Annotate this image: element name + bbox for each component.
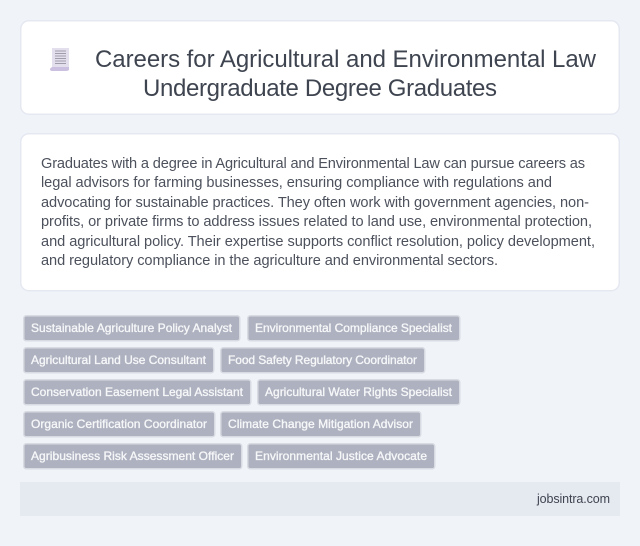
text block: description: Graduates with a degree in Agricultural and Environmental Law can pursue careers as: [41, 156, 585, 172]
tag: Climate Change Mitigation Advisor: [228, 417, 413, 431]
tag: [24, 412, 215, 437]
footer: [20, 482, 620, 516]
footer: jobsintra.com: [536, 492, 610, 506]
panel: description: [21, 134, 619, 291]
tag: Conservation Easement Legal Assistant: [31, 385, 244, 399]
tag: Organic Certification Coordinator: [31, 417, 207, 431]
tag: [248, 316, 460, 341]
career tags: [24, 316, 460, 469]
tag: Agribusiness Risk Assessment Officer: [31, 449, 234, 463]
icon: document scroll: [50, 48, 69, 71]
tag: Agricultural Land Use Consultant: [31, 353, 207, 367]
text block: description: and agricultural policy. Their expertise supports conflict resolution, policy development,: [41, 234, 595, 250]
tag: Food Safety Regulatory Coordinator: [228, 353, 417, 367]
tag: Environmental Justice Advocate: [255, 449, 427, 463]
tag: Environmental Compliance Specialist: [255, 321, 453, 335]
tag: [24, 348, 214, 373]
text block: description: advocating for sustainable practices. They often work with government agencies, non-: [41, 195, 589, 211]
tag: [258, 380, 460, 405]
tag: [24, 316, 240, 341]
tag: Sustainable Agriculture Policy Analyst: [31, 321, 233, 335]
tag: [221, 412, 421, 437]
tag: Agricultural Water Rights Specialist: [265, 385, 453, 399]
title: Undergraduate Degree Graduates: [143, 75, 497, 102]
text block: description: profits, or private firms to address issues related to land use, environmental protection,: [41, 214, 592, 230]
title: Careers for Agricultural and Environmental Law: [95, 46, 597, 73]
text block: description: and regulatory compliance in the agriculture and environmental sectors.: [41, 253, 498, 269]
text block: description: legal advisors for farming businesses, ensuring compliance with regulations and: [41, 175, 552, 191]
panel: header: [21, 21, 619, 114]
tag: [24, 444, 242, 469]
title: [95, 46, 597, 102]
tag: [221, 348, 425, 373]
text block: description: [41, 156, 595, 269]
tag: [248, 444, 435, 469]
tag: [24, 380, 251, 405]
